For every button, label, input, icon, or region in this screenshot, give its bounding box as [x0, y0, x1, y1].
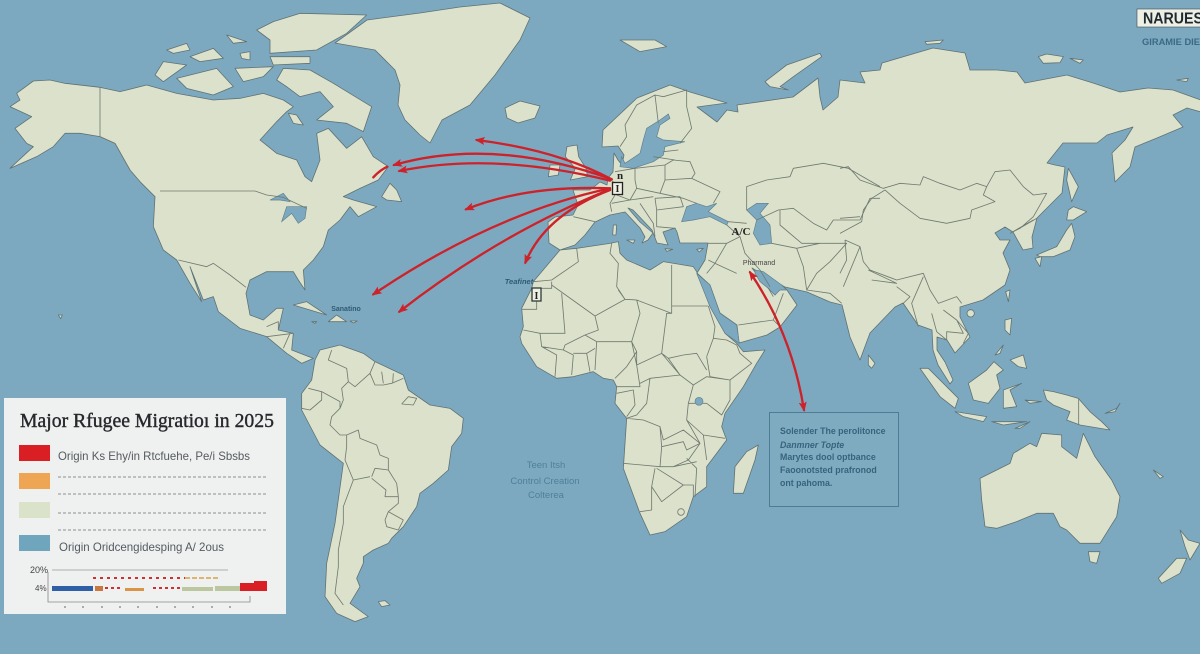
callout box: Marytes dool optbance: [780, 452, 876, 462]
landmass: North America: [10, 13, 402, 363]
inland seas: [548, 40, 880, 303]
landmass: Africa: [520, 242, 765, 535]
callout box: [770, 412, 898, 506]
marker: Europe box: [612, 182, 622, 195]
mini bar chart: [30, 565, 267, 608]
legend swatches: [19, 445, 50, 551]
top-right subtitle: GIRAMIE DIE: [1142, 37, 1200, 48]
landmass: Southeast Asia and Oceania: [868, 310, 1200, 583]
legend dashed rows: [58, 477, 266, 530]
map labels: [331, 170, 775, 501]
legend text row one: Origin Ks Ehy/in Rtcfuehe, Pe/i Sbsbs: [58, 449, 250, 463]
label: central Atlantic: Colterea: [528, 490, 565, 501]
label: West Africa: Teafinet: [505, 277, 534, 286]
marker: West Africa box: I: [535, 291, 539, 302]
label: central Atlantic: Teen Itsh: [527, 460, 565, 471]
mini bar chart: 4%: [35, 584, 47, 593]
callout box: Danmner Topte: [780, 440, 844, 450]
legend title: Major Rfugee Migratioı in 2025: [20, 410, 274, 432]
label: central Atlantic: Control Creation: [510, 476, 580, 487]
migration arrow: Gulf to callout: [750, 272, 804, 410]
legend text row two: Origin Oridcengidesping A/ 2ous: [59, 540, 224, 554]
legend panel: [4, 398, 286, 614]
marker: Europe box: I: [616, 184, 620, 195]
label: Gulf: Pharmand: [743, 260, 775, 267]
callout box: Solender The perolitonce: [780, 426, 886, 436]
mini bar chart: 20%: [30, 565, 48, 575]
label: Caribbean: Sanatino: [331, 306, 361, 313]
landmass: Greenland and Iceland: [335, 3, 540, 143]
landmass: Eurasia: [548, 40, 1200, 384]
callout box: ont pahoma.: [780, 478, 832, 488]
callout box: Faoonotsted prafronod: [780, 465, 877, 475]
marker: West Africa box: [532, 288, 541, 302]
marker: Europe upper: n: [617, 170, 623, 182]
Red Sea and Persian Gulf: [697, 270, 787, 343]
label: A/C: A/C: [732, 226, 751, 238]
landmass: South America: [302, 345, 463, 622]
migration arrows: Europe to Atlantic: [373, 140, 612, 312]
